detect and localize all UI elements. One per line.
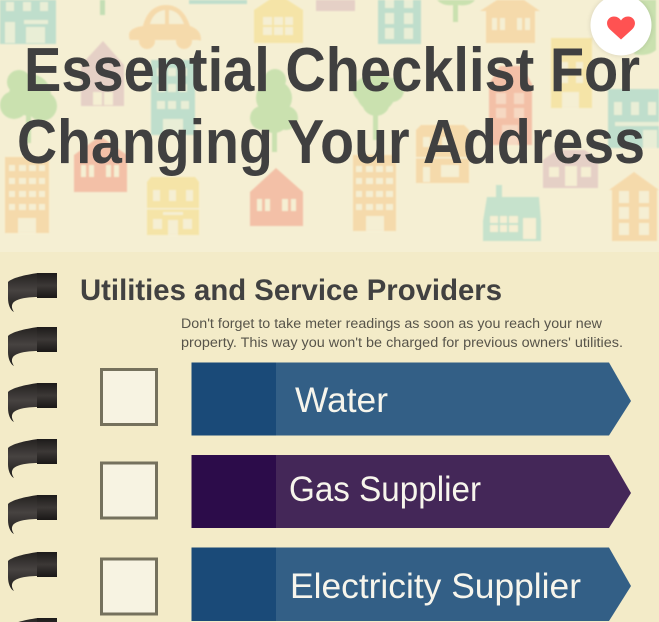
house: pink left (81, 41, 124, 106)
icon: heart badge (590, 0, 652, 56)
house: orange right (609, 172, 659, 241)
house: red left (74, 136, 127, 192)
section description (181, 316, 623, 350)
arrow: electricity supplier: Electricity Supplier (290, 567, 581, 606)
tree: top right (437, 0, 475, 22)
background: town header (0, 0, 659, 241)
building: top-left teal (0, 0, 56, 44)
tree: middle right (353, 72, 404, 140)
ring 7 (8, 618, 57, 622)
section description: Don't forget to take meter readings as soon as you reach your new (181, 316, 602, 331)
house: top yellow (254, 0, 303, 43)
building: orange lower (353, 155, 396, 231)
arrow: gas supplier (192, 455, 631, 528)
icon: car (129, 5, 201, 49)
building: top teal right (378, 0, 421, 44)
building: yellow (147, 177, 199, 235)
roof strips: top teal and pink (189, 0, 355, 11)
arrow: gas supplier: Gas Supplier (289, 470, 481, 509)
title (17, 36, 645, 177)
arrow: electricity supplier (192, 548, 631, 621)
notebook binding rings (8, 273, 57, 622)
checkbox: water (102, 370, 156, 424)
background: header panel (0, 0, 659, 252)
building: teal right (608, 89, 659, 148)
section heading: Utilities and Service Providers (80, 274, 502, 307)
building: orange left (5, 157, 49, 233)
ring 4 (8, 439, 57, 478)
house: red centre (250, 168, 303, 226)
tree: centre (250, 69, 298, 152)
checkbox: gas (102, 463, 156, 518)
house: top orange (480, 0, 540, 43)
house: pink right (543, 150, 598, 188)
arrow: water: Water (295, 381, 388, 420)
building: orange middle (416, 125, 469, 183)
arrow: water (192, 362, 631, 436)
tree: behind heart (634, 0, 656, 55)
building: yellow right (551, 38, 592, 108)
ring 2 (8, 327, 57, 366)
ring 1 (8, 273, 57, 312)
checkbox: electricity (102, 559, 156, 614)
section description: property. This way you won't be charged for previous owners' utilities. (181, 335, 623, 350)
building: red tall (489, 66, 532, 145)
house: teal lower (483, 185, 541, 241)
tree: top small (100, 0, 105, 15)
ring 6 (8, 552, 57, 591)
building: teal centre (151, 60, 195, 135)
ring 3 (8, 383, 57, 422)
tree: left (0, 70, 57, 143)
ring 5 (8, 495, 57, 534)
